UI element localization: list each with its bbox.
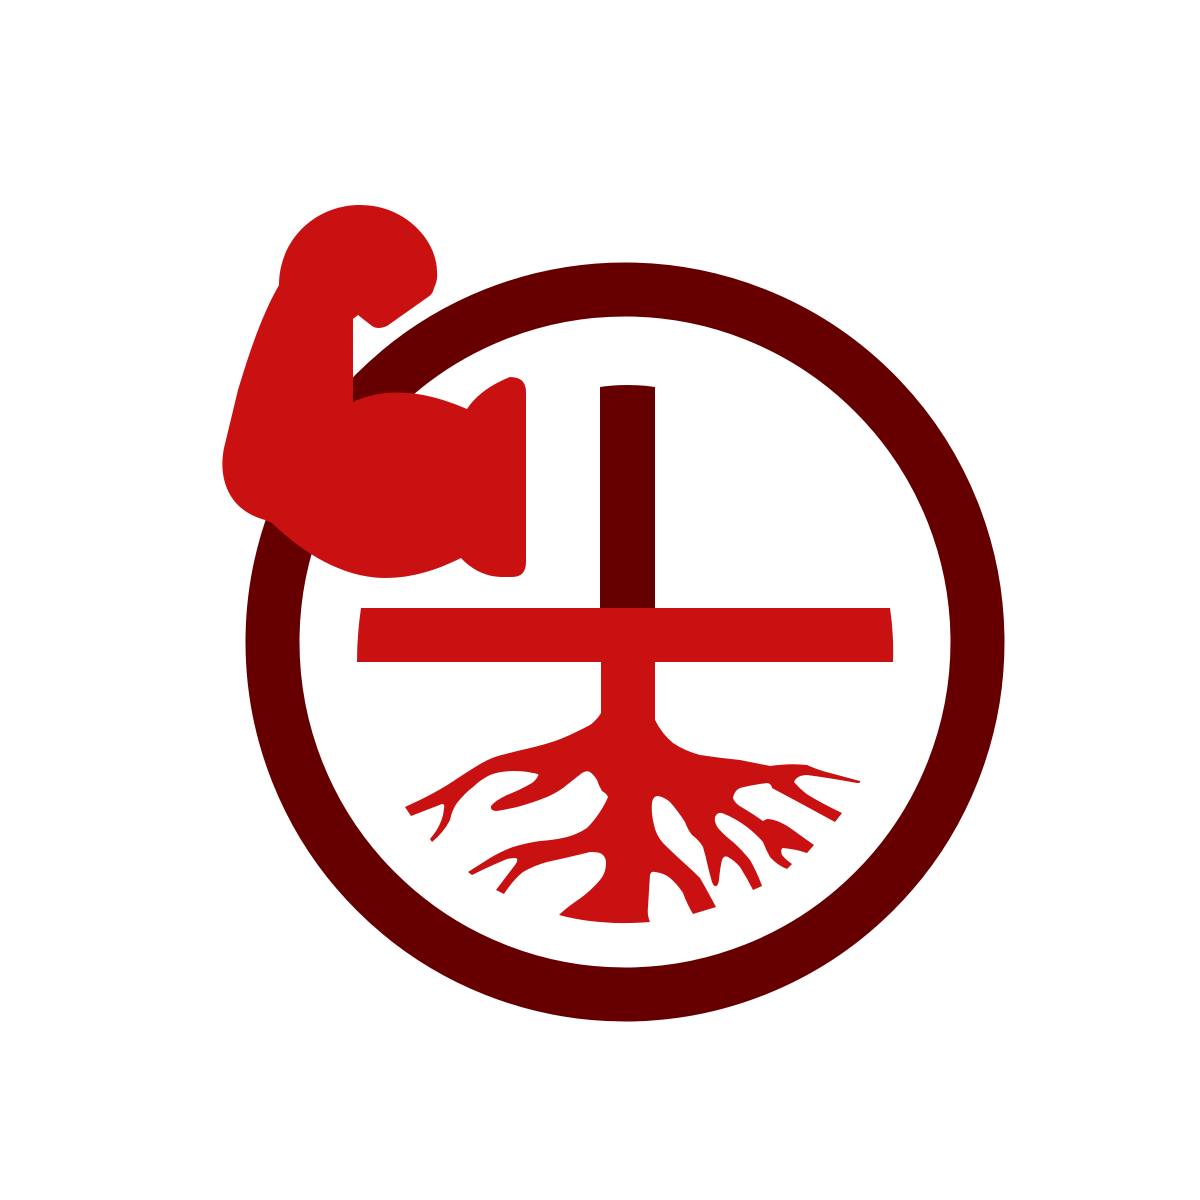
ground bar and roots bbox=[357, 608, 893, 923]
vertical trunk bbox=[600, 385, 655, 610]
dark red ring bbox=[272, 290, 978, 994]
horizontal ground bar bbox=[357, 608, 893, 662]
icon: flexed arm bbox=[222, 205, 526, 578]
root system bbox=[405, 660, 860, 923]
